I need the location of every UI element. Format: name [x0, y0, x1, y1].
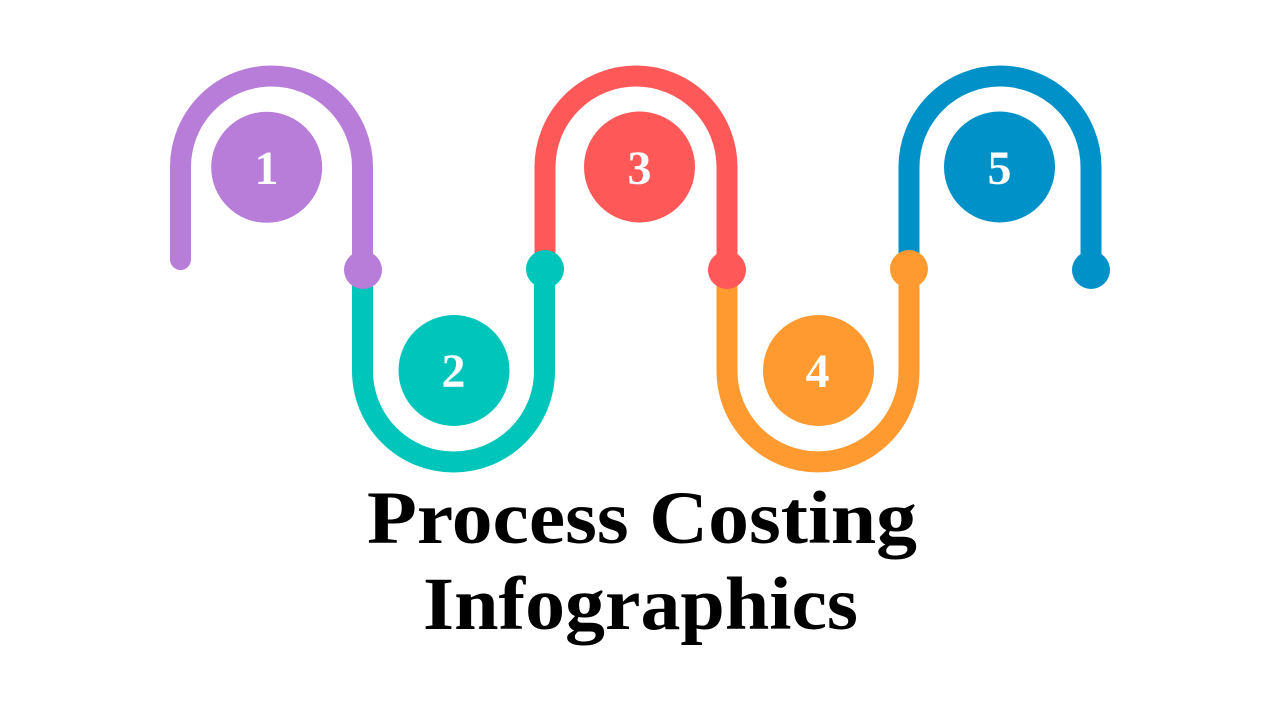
connector dot: red [708, 251, 746, 289]
connector dot: purple [344, 251, 382, 289]
connector dot: teal [526, 250, 564, 288]
title: Infographics [423, 563, 858, 646]
step 3: red arch [545, 76, 727, 270]
title [367, 477, 917, 646]
step 2: teal arch: 2 [442, 345, 466, 398]
step 3: red arch: 3 [628, 142, 652, 195]
step 2: teal arch [362, 270, 544, 462]
title: Process Costing [367, 477, 917, 560]
step 5: blue arch: 5 [988, 142, 1012, 195]
end dot: blue [1072, 251, 1110, 289]
step 1: purple arch: 1 [254, 142, 278, 195]
connector dot: orange [890, 250, 928, 288]
step 4: orange arch [727, 270, 909, 462]
step 5: blue arch [909, 76, 1091, 270]
step 4: orange arch: 4 [806, 345, 830, 398]
step 1: purple arch [180, 76, 362, 270]
